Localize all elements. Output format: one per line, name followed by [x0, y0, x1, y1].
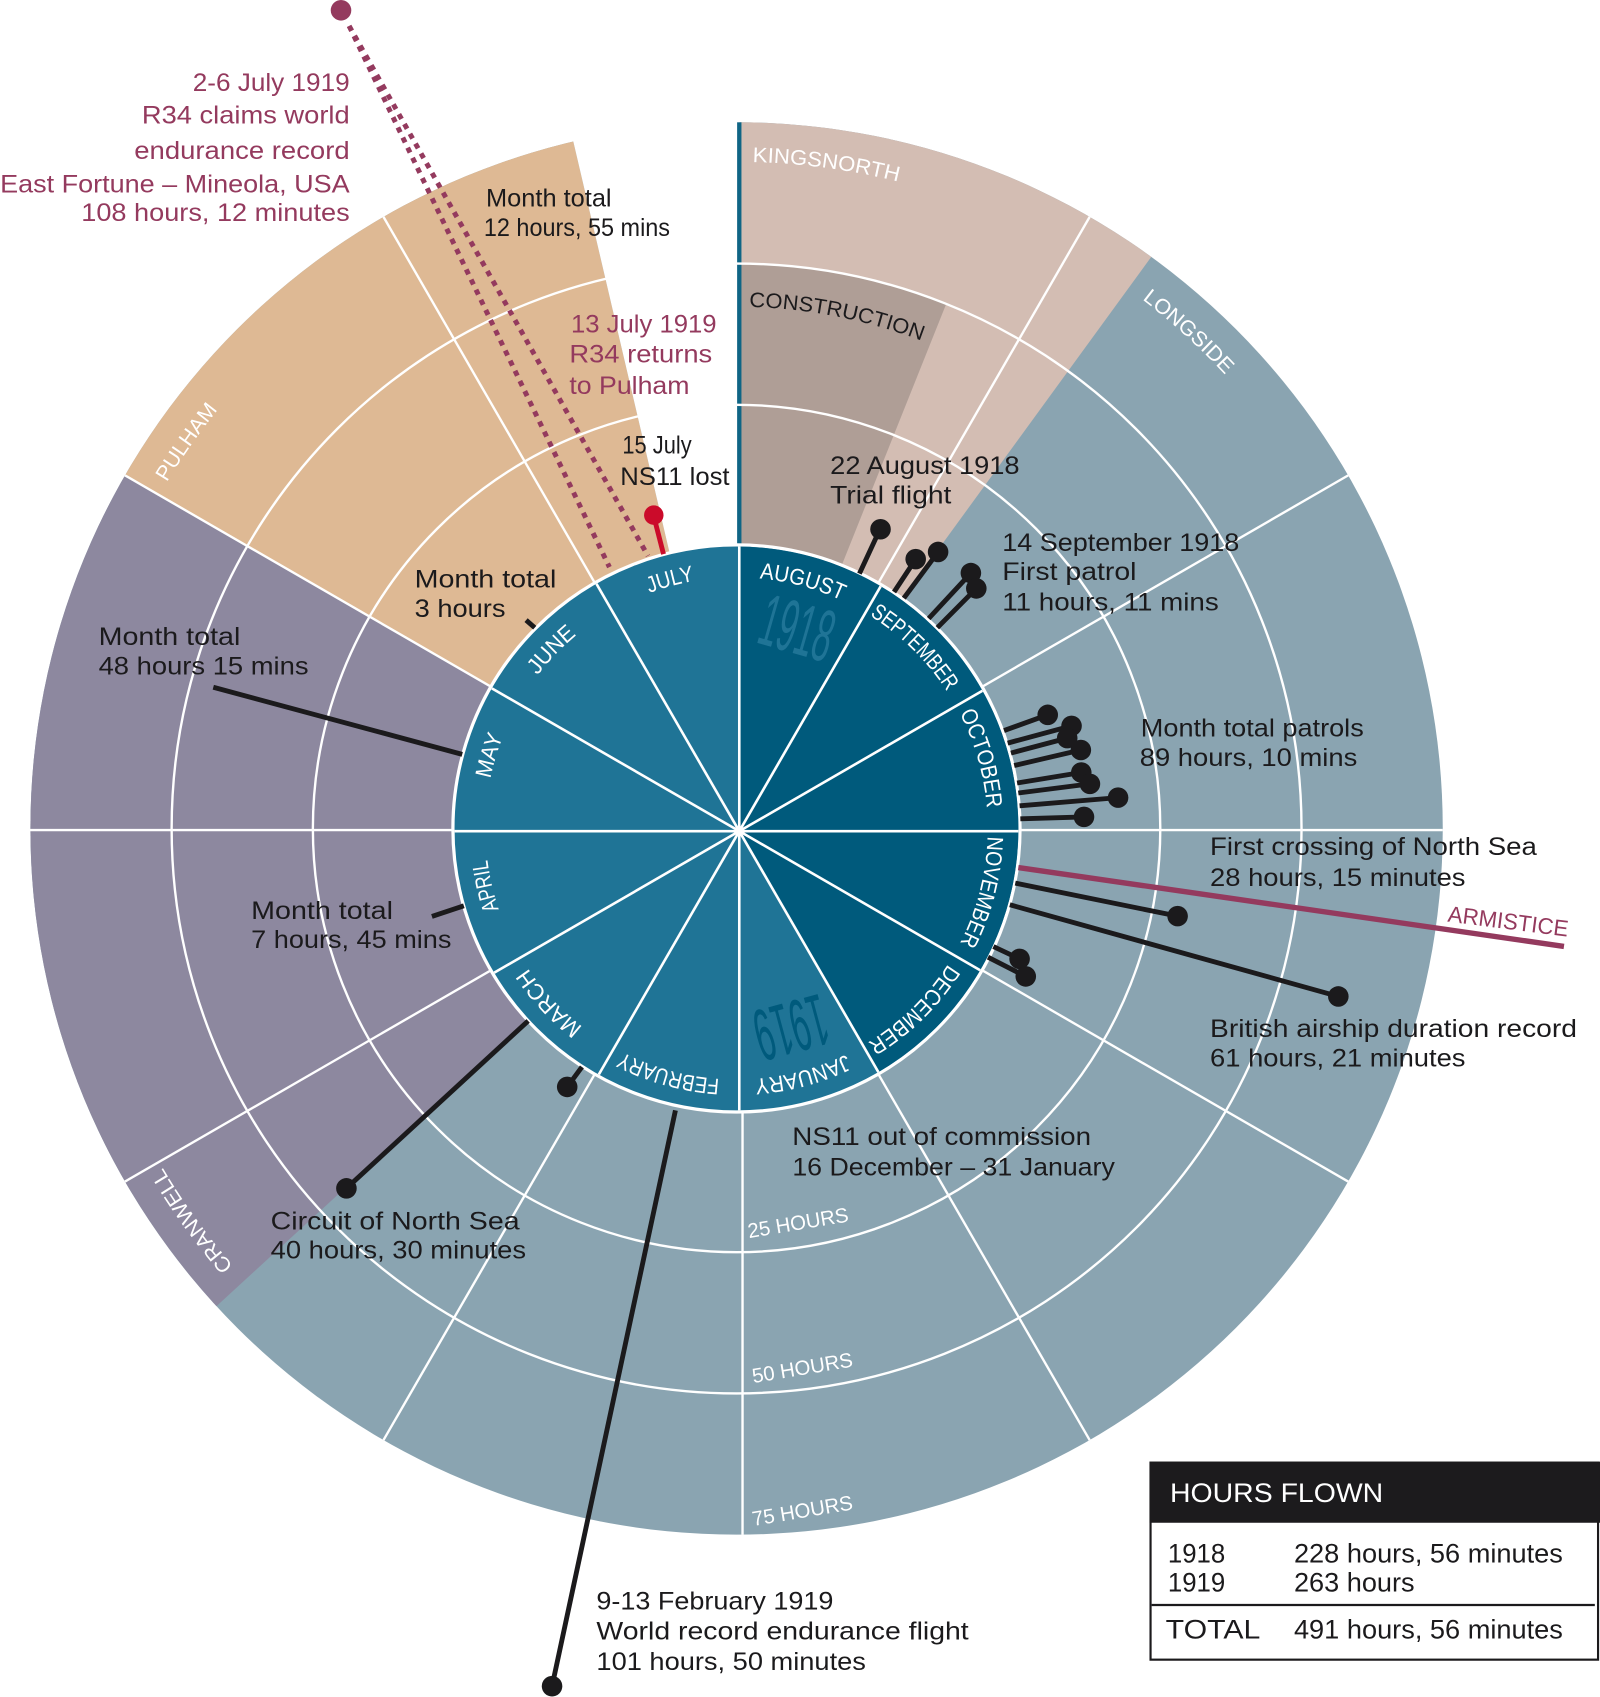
- first crossing text: 28 hours, 15 minutes: [1210, 864, 1465, 892]
- April leader: [432, 906, 464, 916]
- sector: Construction: [742, 264, 946, 564]
- flight pins: [213, 519, 1349, 1696]
- R34 returns text: to Pulham: [569, 372, 690, 400]
- white gap before August: [526, 0, 740, 831]
- circuit of North Sea text: 40 hours, 30 minutes: [271, 1237, 526, 1265]
- disc outline and 1919 colour: [453, 545, 1020, 1112]
- July month total: [484, 185, 670, 242]
- month labels: OCTOBER: [962, 709, 1002, 808]
- first crossing text: First crossing of North Sea: [1210, 833, 1538, 861]
- May month total: [99, 623, 309, 680]
- R34 world record marker: [331, 0, 351, 21]
- world record endurance text: [596, 1587, 969, 1676]
- British duration record pin: [1010, 905, 1349, 1007]
- first crossing of North Sea pin: [1015, 883, 1188, 926]
- station labels: KINGSNORTH: [754, 148, 900, 182]
- Armistice label: ARMISTICE: [1446, 901, 1570, 942]
- row total: 491 hours, 56 minutes: [1294, 1615, 1563, 1645]
- June month total: Month total: [415, 566, 556, 594]
- world record endurance text: 9-13 February 1919: [596, 1587, 833, 1615]
- R34 record text: 2-6 July 1919: [193, 69, 350, 97]
- year 1918 watermark: 1918: [750, 578, 844, 678]
- station labels: CRANWELL: [154, 1168, 230, 1272]
- October month total: [1140, 714, 1364, 772]
- hour ring labels: [746, 1204, 855, 1531]
- R34 returns text: R34 returns: [569, 341, 712, 369]
- table header: [1149, 1462, 1600, 1523]
- hour ring labels: 75 HOURS: [750, 1491, 855, 1531]
- June month total: 3 hours: [415, 595, 506, 623]
- May month total: Month total: [99, 623, 240, 651]
- month labels: DECEMBER: [868, 965, 960, 1054]
- month labels: AUGUST: [760, 564, 848, 598]
- month labels: APRIL: [472, 860, 499, 910]
- month labels: MAY: [476, 731, 501, 778]
- month labels: SEPTEMBER: [872, 604, 958, 691]
- 1918 months colour: [740, 546, 1018, 1072]
- first patrol text: 11 hours, 11 mins: [1002, 588, 1219, 616]
- out of commission text: 16 December – 31 January: [792, 1153, 1115, 1181]
- world record endurance text: 101 hours, 50 minutes: [596, 1648, 866, 1676]
- station labels: CONSTRUCTION: [750, 292, 925, 340]
- British duration record text: [1210, 1015, 1577, 1073]
- out of commission text: NS11 out of commission: [792, 1123, 1091, 1151]
- October month total: Month total patrols: [1141, 714, 1364, 742]
- first patrol text: First patrol: [1002, 558, 1136, 586]
- row 1919: 1919: [1168, 1567, 1225, 1597]
- table: hours flown: [1149, 1462, 1600, 1660]
- R34 record text: R34 claims world: [142, 101, 350, 129]
- July month total: 12 hours, 55 mins: [484, 214, 670, 242]
- British duration record text: 61 hours, 21 minutes: [1210, 1045, 1465, 1073]
- row total: TOTAL: [1166, 1615, 1260, 1645]
- world record endurance pin: [542, 1110, 675, 1696]
- row total: [1166, 1615, 1563, 1645]
- R34 returns text: [569, 310, 717, 400]
- circuit of North Sea text: Circuit of North Sea: [271, 1207, 521, 1235]
- April month total: Month total: [251, 897, 393, 925]
- station labels: LONGSIDE: [1144, 289, 1235, 374]
- month labels: JULY: [648, 566, 691, 592]
- circuit of North Sea text: [271, 1207, 526, 1265]
- hour rings: [172, 264, 1302, 1393]
- row 1919: 263 hours: [1294, 1567, 1415, 1597]
- station labels: PULHAM: [155, 402, 217, 481]
- NS11 lost text: 15 July: [622, 431, 692, 459]
- row 1919: [1168, 1567, 1415, 1597]
- NS11 lost text: [620, 431, 730, 491]
- month disc: [451, 543, 1022, 1114]
- R34 returns text: 13 July 1919: [571, 310, 717, 338]
- month labels: NOVEMBER: [960, 838, 1004, 948]
- R34 record text: endurance record: [134, 137, 350, 165]
- British duration record text: British airship duration record: [1210, 1015, 1577, 1043]
- row 1918: [1168, 1538, 1563, 1568]
- row 1918: 1918: [1168, 1538, 1225, 1568]
- disc spokes: [454, 546, 1018, 1110]
- trial flight text: 22 August 1918: [830, 452, 1020, 480]
- sector: Cranwell: [30, 476, 526, 1306]
- month labels: FEBRUARY: [616, 1054, 718, 1094]
- hour ring labels: 50 HOURS: [750, 1349, 855, 1388]
- sector: Pulham: [125, 142, 669, 685]
- year start marker line: [737, 122, 741, 550]
- R34 dotted flight lines: [349, 26, 648, 567]
- May leader: [213, 687, 462, 754]
- October month total: 89 hours, 10 mins: [1140, 744, 1357, 772]
- total divider: [1152, 1604, 1595, 1606]
- R34 record text: [0, 69, 350, 227]
- NS11 lost red pin: [644, 505, 664, 554]
- July month total: Month total: [486, 185, 612, 213]
- March short pin: [557, 1067, 582, 1097]
- R34 record text: 108 hours, 12 minutes: [81, 199, 350, 227]
- first patrol text: 14 September 1918: [1002, 529, 1239, 557]
- April month total: 7 hours, 45 mins: [251, 926, 451, 954]
- header title: HOURS FLOWN: [1170, 1478, 1383, 1508]
- row 1918: 228 hours, 56 minutes: [1294, 1538, 1563, 1568]
- radial chart of base stations: [30, 122, 1443, 1535]
- trial flight pin: [859, 519, 891, 574]
- September pins: [894, 542, 987, 628]
- circuit of North Sea pin: [336, 1021, 528, 1199]
- trial flight text: Trial flight: [830, 481, 951, 509]
- first crossing text: [1210, 833, 1538, 892]
- hour ring labels: 25 HOURS: [746, 1204, 850, 1243]
- station labels: [154, 148, 1235, 1272]
- April month total: [251, 897, 451, 954]
- October pins: [1004, 705, 1128, 827]
- out of commission text: [792, 1123, 1115, 1181]
- November short pins: [988, 947, 1036, 987]
- trial flight text: [830, 452, 1020, 509]
- NS11 lost text: NS11 lost: [620, 463, 730, 491]
- month spokes: [29, 217, 1443, 1535]
- June month total: [415, 566, 556, 623]
- May month total: 48 hours 15 mins: [99, 652, 309, 680]
- year 1919 watermark: 1919: [745, 978, 837, 1077]
- month labels: [472, 564, 1004, 1094]
- month labels: MARCH: [516, 970, 582, 1038]
- R34 record text: East Fortune – Mineola, USA: [0, 171, 350, 199]
- June leader: [526, 620, 535, 628]
- month labels: JANUARY: [756, 1056, 849, 1094]
- Armistice line: [1018, 868, 1564, 946]
- sector: Longside: [30, 122, 1443, 1535]
- world record endurance text: World record endurance flight: [596, 1618, 969, 1646]
- sector: Kingsnorth: [739, 122, 1152, 596]
- first patrol text: [1002, 529, 1239, 616]
- month labels: JUNE: [528, 624, 576, 674]
- table frame: [1151, 1463, 1598, 1660]
